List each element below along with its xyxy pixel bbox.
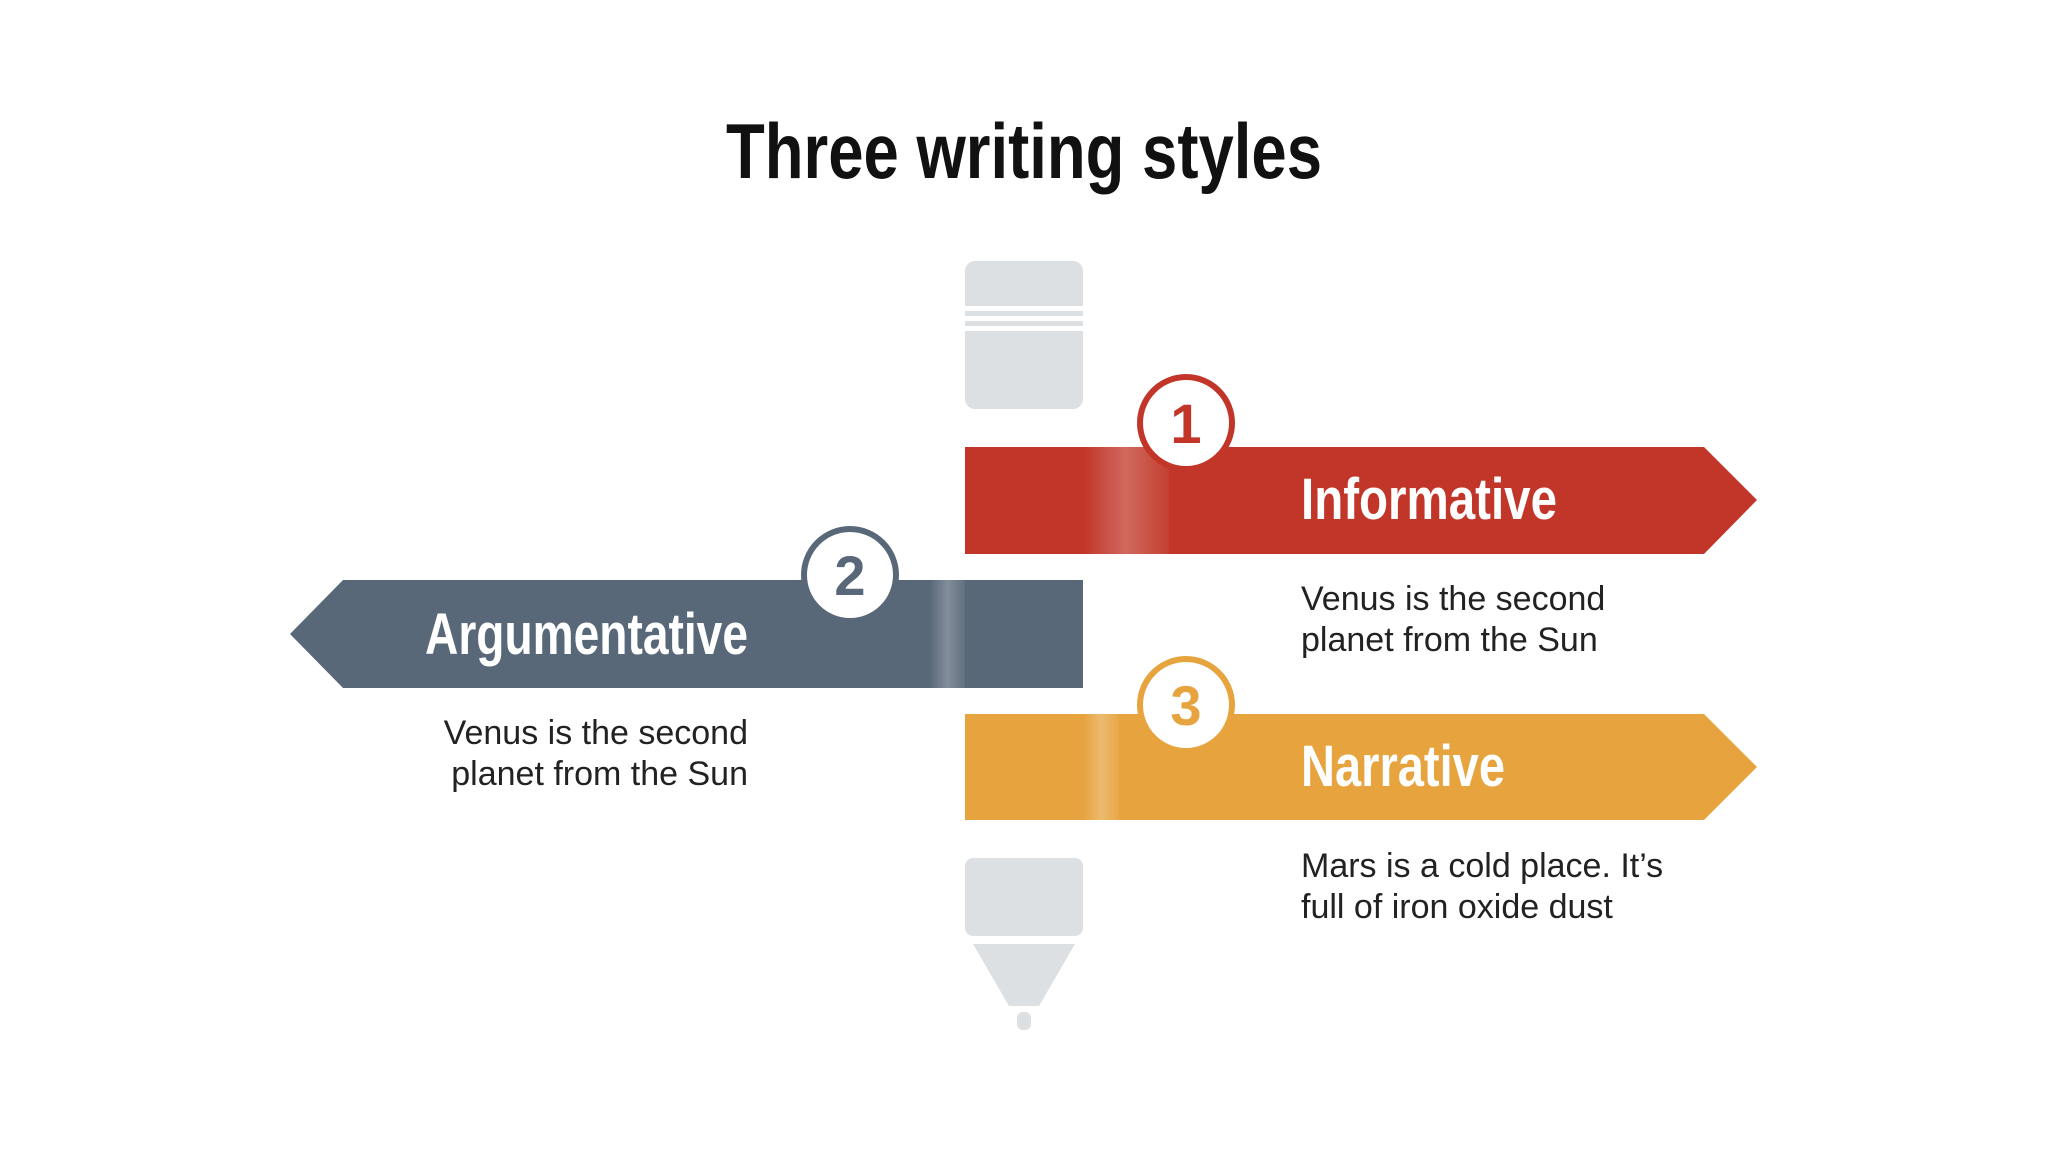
heading: narrative: Narrative <box>1301 734 1505 799</box>
heading: informative: Informative <box>1301 467 1557 532</box>
bar: informative <box>965 447 1757 554</box>
text: narrative: full of iron oxide dust <box>1301 888 1613 926</box>
circle 2: 2 <box>834 544 866 607</box>
bar: narrative <box>965 714 1757 820</box>
circle 2 <box>804 529 896 621</box>
text: informative: Venus is the second <box>1301 580 1605 618</box>
text: argumentative: Venus is the second <box>444 714 748 752</box>
text: argumentative: planet from the Sun <box>451 755 748 793</box>
text: informative: planet from the Sun <box>1301 621 1598 659</box>
circle 1 <box>1140 377 1232 469</box>
circle 3 <box>1140 659 1232 751</box>
text: narrative: Mars is a cold place. It’s <box>1301 847 1663 885</box>
heading: argumentative: Argumentative <box>425 602 748 667</box>
title: Three writing styles <box>726 107 1322 195</box>
circle 1: 1 <box>1170 392 1202 455</box>
bar: argumentative <box>290 580 1083 688</box>
pencil tip <box>965 858 1083 1030</box>
pencil eraser <box>965 261 1083 409</box>
circle 3: 3 <box>1170 674 1202 737</box>
